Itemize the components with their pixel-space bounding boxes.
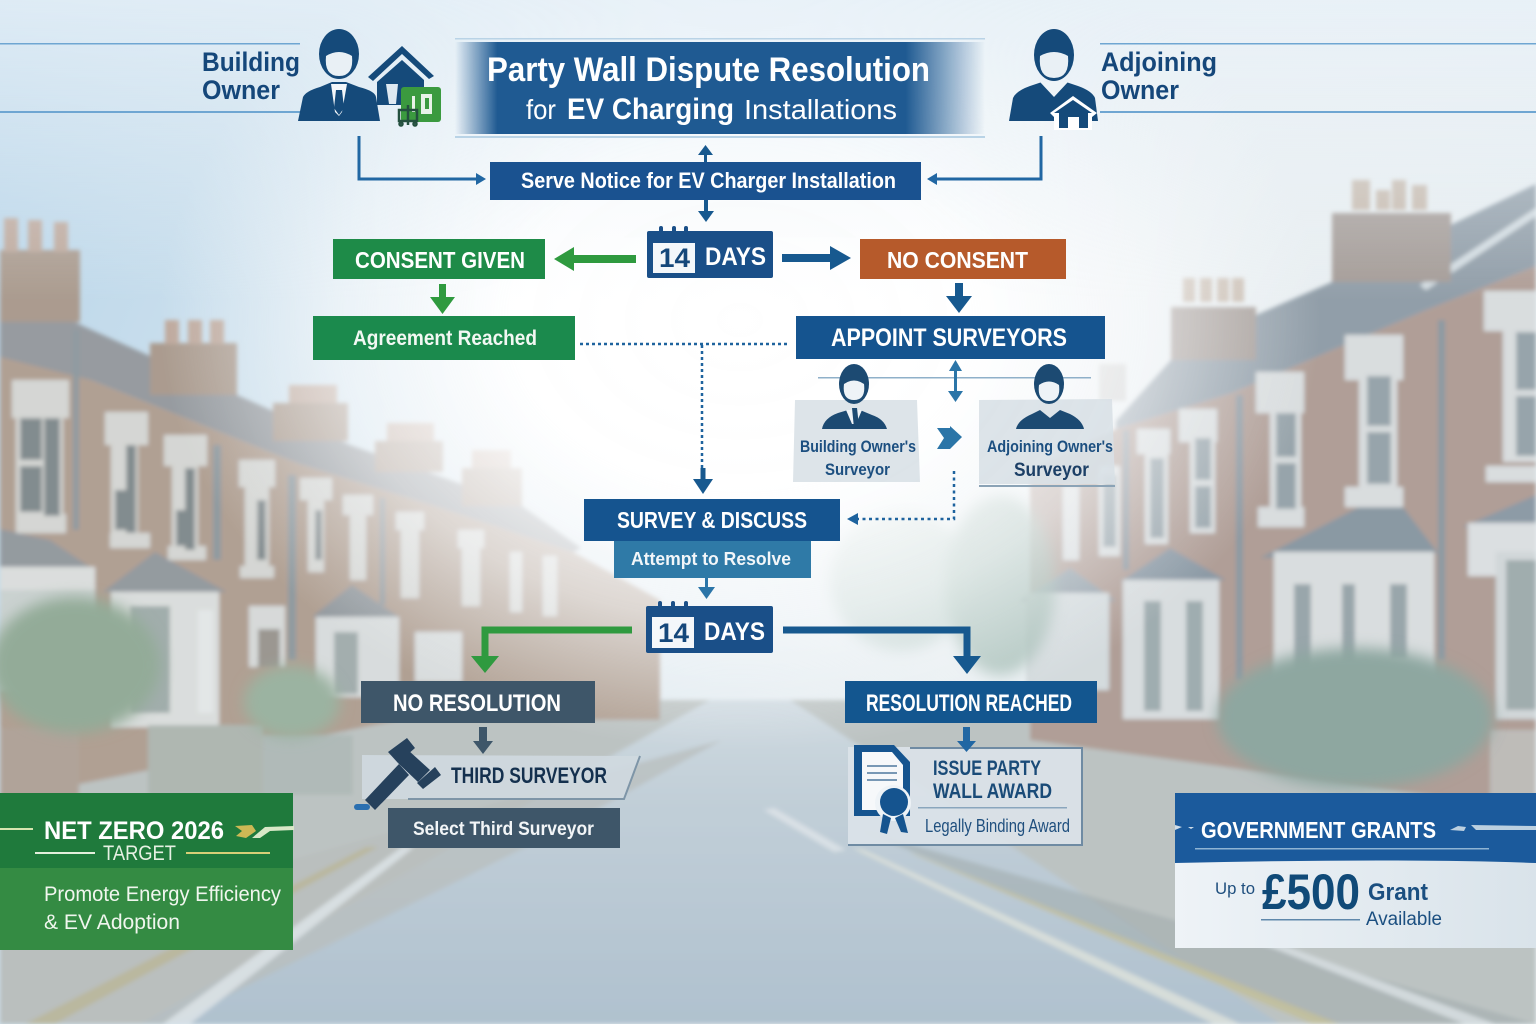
arrow: no resolution to third surveyor — [473, 727, 493, 754]
arrow: double headed — [948, 360, 963, 402]
adjoining owner label: Owner — [1101, 75, 1179, 105]
badge: 14 days first: DAYS — [705, 243, 766, 271]
badge: 14 days second: DAYS — [704, 618, 765, 646]
icon: certificate with seal — [854, 745, 911, 834]
box: serve notice — [490, 162, 921, 200]
panel: issue party wall award: WALL AWARD — [933, 780, 1052, 803]
box: survey and discuss — [584, 499, 840, 541]
icon: gavel — [354, 738, 441, 810]
box: appoint surveyors: APPOINT SURVEYORS — [831, 324, 1067, 352]
box: appoint surveyors — [796, 316, 1105, 359]
building owner label: Building — [202, 47, 300, 77]
card: adjoining owner's surveyor — [979, 364, 1115, 487]
dotted arrow: surveyors to survey and discuss — [847, 471, 954, 525]
panel: government grants: £500 — [1262, 864, 1360, 920]
panel: government grants — [1175, 793, 1536, 948]
adjoining owner label — [1101, 47, 1217, 105]
arrow: to no consent — [782, 246, 851, 270]
arrow: resolution to award — [957, 727, 976, 752]
left terrace — [0, 218, 660, 800]
box: consent given: CONSENT GIVEN — [355, 247, 525, 273]
title banner — [455, 38, 985, 138]
panel: net zero target: TARGET — [103, 842, 176, 865]
panel: net zero target: & EV Adoption — [44, 911, 180, 934]
panel: net zero target: NET ZERO 2026 — [44, 817, 224, 845]
title banner: for — [526, 94, 556, 125]
adjoining owner label: Adjoining — [1101, 47, 1217, 77]
box: attempt to resolve — [614, 541, 811, 578]
badge: 14 days first: 14 — [659, 243, 690, 273]
dotted connector: agreement to survey — [580, 344, 788, 494]
arrow: to no resolution — [471, 630, 632, 673]
icon: adjoining owner person with house — [1009, 29, 1098, 130]
card: building owner's surveyor — [793, 364, 920, 482]
arrow: notice to title — [698, 145, 713, 162]
arrow: adjoining owner to notice — [927, 136, 1041, 185]
panel: third surveyor — [362, 755, 640, 799]
building owner label — [202, 47, 300, 105]
arrow: to consent given — [554, 247, 636, 271]
arrow: no consent to surveyors — [946, 283, 972, 313]
panel: net zero target — [0, 793, 294, 950]
box: resolution reached — [845, 681, 1097, 723]
box: no resolution — [361, 681, 595, 723]
title banner: EV Charging — [567, 93, 734, 126]
trees — [0, 495, 1493, 788]
box: no resolution: NO RESOLUTION — [393, 690, 561, 717]
panel: government grants: Grant — [1368, 879, 1428, 906]
box: serve notice: Serve Notice for EV Charger Installation — [521, 168, 896, 193]
building owner label: Owner — [202, 75, 280, 105]
panel: government grants: Available — [1366, 909, 1442, 930]
box: agreement reached: Agreement Reached — [353, 327, 537, 350]
panel: government grants: Up to — [1215, 880, 1255, 898]
box: no consent: NO CONSENT — [887, 247, 1028, 273]
title banner: Party Wall Dispute Resolution — [487, 51, 930, 89]
panel: issue party wall award — [848, 747, 1082, 845]
card: building owner's surveyor: Surveyor — [825, 460, 890, 479]
badge: 14 days second: 14 — [658, 618, 689, 648]
card: building owner's surveyor: Building Owner's — [800, 437, 916, 456]
icon: house with EV charger — [368, 46, 441, 126]
decorative header rules — [0, 43, 1536, 113]
panel: third surveyor: THIRD SURVEYOR — [451, 763, 607, 788]
card: adjoining owner's surveyor: Surveyor — [1014, 460, 1090, 481]
panel: government grants: GOVERNMENT GRANTS — [1201, 817, 1436, 843]
box: agreement reached — [313, 316, 575, 360]
badge: 14 days first — [647, 226, 773, 278]
arrow: attempt to 14 days — [698, 578, 715, 599]
panel: issue party wall award: Legally Binding Award — [925, 816, 1070, 836]
arrow: consent to agreement — [430, 284, 455, 314]
title banner: Installations — [744, 94, 897, 125]
box: attempt to resolve: Attempt to Resolve — [631, 549, 791, 569]
box: select third surveyor: Select Third Surveyor — [413, 819, 595, 840]
arrow: between surveyors — [937, 426, 962, 449]
arrow: building owner to notice — [359, 136, 486, 185]
card: adjoining owner's surveyor: Adjoining Owner's — [987, 437, 1113, 456]
badge: 14 days second — [646, 601, 773, 653]
surveyors divider line — [818, 377, 1091, 378]
arrow: to resolution reached — [783, 630, 981, 674]
box: consent given — [333, 239, 545, 279]
panel: issue party wall award: ISSUE PARTY — [933, 757, 1041, 780]
icon: building owner person — [298, 29, 380, 121]
box: resolution reached: RESOLUTION REACHED — [866, 690, 1072, 717]
box: select third surveyor — [388, 808, 620, 848]
panel: net zero target: Promote Energy Efficiency — [44, 883, 281, 906]
arrow: notice to 14 days — [698, 200, 714, 222]
box: no consent — [860, 239, 1066, 279]
right terrace — [1020, 180, 1536, 810]
road and pavements — [0, 700, 1536, 1024]
box: survey and discuss: SURVEY & DISCUSS — [617, 507, 807, 533]
